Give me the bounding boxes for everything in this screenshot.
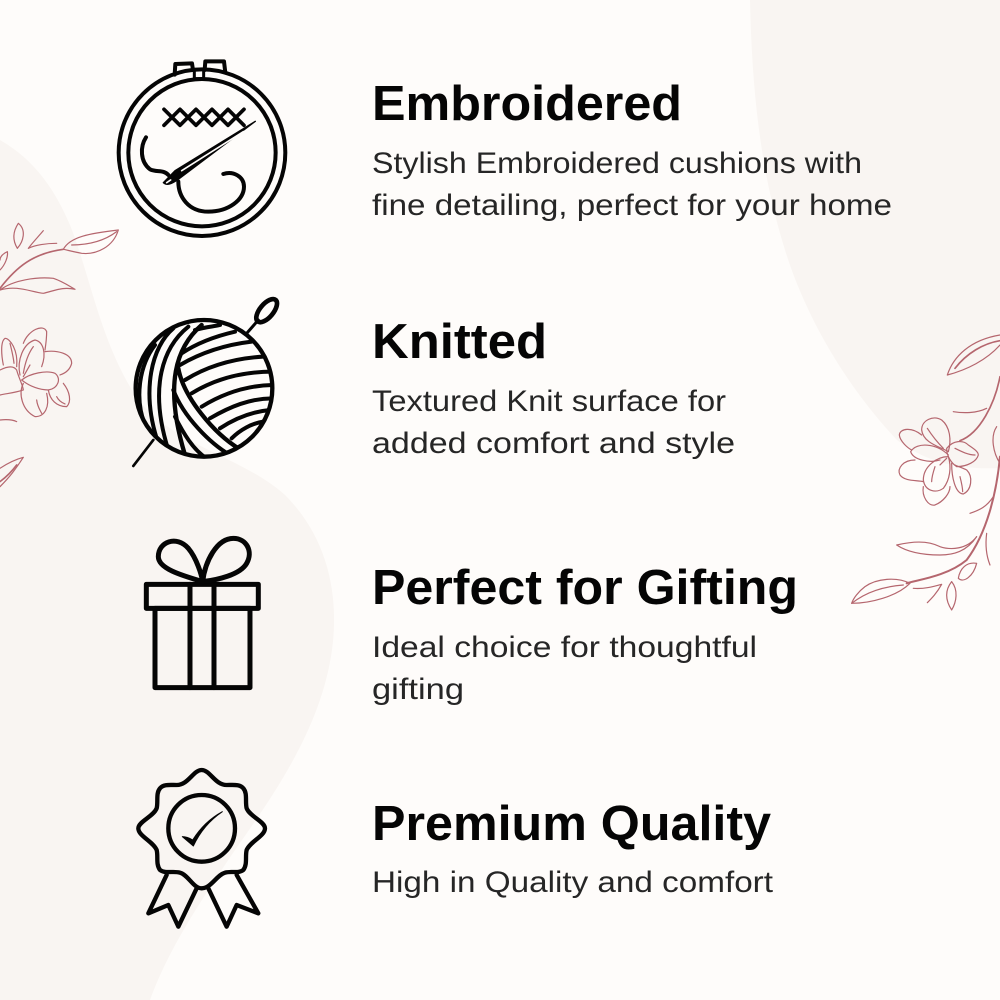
heading: Perfect for Gifting: Perfect for Gifting (372, 561, 798, 615)
background blob: top right (750, 0, 1000, 468)
description: Embroidered: fine detailing, perfect for your home (372, 189, 892, 222)
heading: Premium Quality: Premium Quality (372, 797, 771, 851)
floral decoration: left (0, 223, 118, 487)
description: Perfect for Gifting: Ideal choice for thoughtful (372, 631, 757, 664)
description: Embroidered (372, 147, 892, 222)
feature: Premium Quality (372, 797, 774, 899)
feature: Knitted (372, 315, 735, 460)
description: Perfect for Gifting: gifting (372, 673, 464, 706)
icon: embroidery hoop (119, 61, 285, 236)
description: Knitted: Textured Knit surface for (372, 385, 726, 418)
background blob: left (0, 140, 334, 1000)
description: Knitted: added comfort and style (372, 427, 735, 460)
heading: Knitted: Knitted (372, 315, 547, 369)
description: Embroidered: Stylish Embroidered cushions with (372, 147, 862, 180)
icon: quality badge (138, 770, 265, 927)
floral decoration: right (852, 335, 1000, 610)
feature: Perfect for Gifting (372, 561, 798, 706)
icon: yarn ball with needle (133, 296, 281, 466)
description: Premium Quality: High in Quality and comfort (372, 866, 774, 899)
description: Knitted (372, 385, 735, 460)
feature: Embroidered (372, 77, 892, 222)
description: Perfect for Gifting (372, 631, 757, 706)
icon: gift box (146, 538, 258, 688)
heading: Embroidered: Embroidered (372, 77, 682, 131)
